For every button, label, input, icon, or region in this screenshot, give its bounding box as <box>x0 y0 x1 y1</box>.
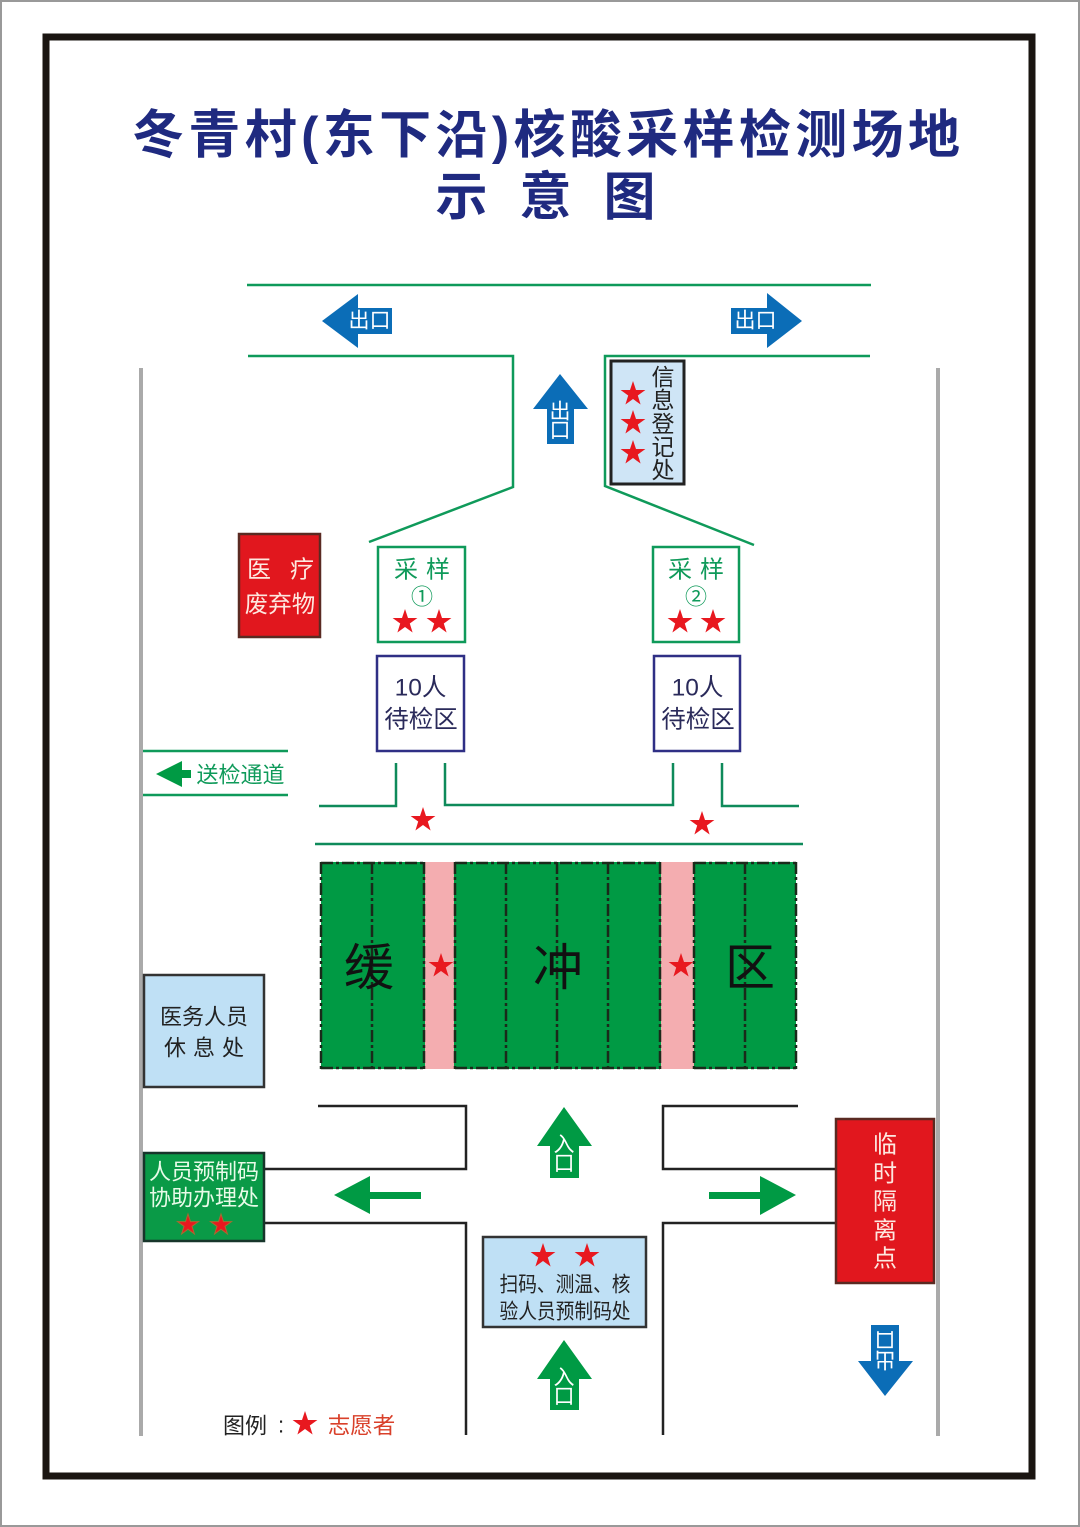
arrow: exit left: 出口 <box>348 310 390 332</box>
arrow: exit right <box>731 293 802 348</box>
panel: temporary isolation point: 点 <box>873 1246 897 1272</box>
icon: volunteer star right lane <box>690 811 714 834</box>
panel: information registration: 信 <box>652 364 674 390</box>
panel: pre-registration code assistance <box>144 1153 264 1241</box>
arrow: exit up: 口 <box>550 420 570 442</box>
panel: information registration: 登 <box>652 411 674 437</box>
panel: sampling point 1: 采 样 <box>394 556 450 584</box>
title <box>132 107 960 227</box>
panel: waiting area 1: 待检区 <box>384 706 458 734</box>
waiting lane lines <box>315 763 803 844</box>
panel: waiting area 1: 10人 <box>395 674 446 702</box>
panel: pre-registration code assistance: 协助办理处 <box>149 1186 259 1210</box>
panel: information registration: 处 <box>652 457 674 483</box>
icon: volunteer star left lane <box>411 807 435 830</box>
panel: scan and temperature check: 扫码、测温、核 <box>500 1274 630 1296</box>
panel: waiting area 2: 10人 <box>672 674 723 702</box>
panel: waiting area 1 <box>377 656 464 751</box>
legend: : <box>278 1412 284 1438</box>
panel: pre-registration code assistance: 人员预制码 <box>149 1160 259 1184</box>
panel: medical staff rest area <box>144 975 264 1087</box>
delivery channel: 送检通道 <box>196 762 285 788</box>
arrow: to right <box>709 1176 796 1215</box>
panel: medical staff rest area: 医务人员 <box>160 1004 248 1030</box>
panel: temporary isolation point: 临 <box>873 1132 897 1158</box>
arrow: entrance up upper <box>537 1107 592 1178</box>
panel: sampling point 2: 采 样 <box>668 556 724 584</box>
arrow: exit down: 口 <box>874 1328 896 1350</box>
panel: medical waste <box>239 534 320 637</box>
arrow: exit up: 出 <box>550 400 570 424</box>
arrow: exit right: 出口 <box>734 310 776 332</box>
panel: buffer zone: 区 <box>725 940 775 996</box>
arrow: to left <box>334 1176 421 1214</box>
site boundary walls <box>141 368 938 1436</box>
title: 冬青村(东下沿)核酸采样检测场地 <box>132 107 960 165</box>
panel: buffer zone: 缓 <box>344 940 394 996</box>
panel: temporary isolation point <box>836 1119 934 1283</box>
legend: 图例 <box>223 1414 267 1438</box>
panel: waiting area 2 <box>654 656 740 751</box>
exit road lines <box>247 285 871 545</box>
arrow: entrance up upper: 口 <box>554 1152 574 1176</box>
arrow: exit left <box>322 294 392 348</box>
entry road lines <box>264 1106 836 1435</box>
panel: buffer zone <box>321 862 796 1069</box>
arrow: entrance up lower: 入 <box>554 1366 574 1390</box>
panel: information registration <box>611 361 684 484</box>
panel: information registration: 记 <box>652 434 674 460</box>
panel: scan and temperature check: 验人员预制码处 <box>500 1300 630 1324</box>
arrow: entrance up lower <box>537 1340 592 1410</box>
panel: medical waste: 废弃物 <box>245 591 315 617</box>
title: 示 意 图 <box>436 169 656 227</box>
panel: sampling point 2 <box>653 547 739 642</box>
panel: sampling point 2: ② <box>685 584 707 610</box>
panel: medical waste: 医 疗 <box>247 556 314 584</box>
arrow: exit down <box>858 1325 913 1396</box>
panel: temporary isolation point: 隔 <box>873 1188 897 1216</box>
arrow: exit up <box>533 374 588 444</box>
panel: temporary isolation point: 离 <box>873 1218 897 1244</box>
legend <box>223 1411 395 1438</box>
panel: sampling point 1: ① <box>411 584 433 610</box>
panel: temporary isolation point: 时 <box>873 1160 897 1188</box>
panel: waiting area 2: 待检区 <box>661 706 735 734</box>
arrow: entrance up upper: 入 <box>554 1134 574 1156</box>
panel: medical staff rest area: 休 息 处 <box>164 1036 244 1060</box>
arrow: exit down: 出 <box>874 1348 896 1370</box>
panel: scan and temperature check <box>483 1237 646 1327</box>
legend: 志愿者 <box>328 1414 395 1438</box>
delivery channel <box>143 751 288 795</box>
arrow: entrance up lower: 口 <box>554 1386 574 1408</box>
panel: buffer zone: 冲 <box>533 940 583 996</box>
panel: information registration: 息 <box>652 387 674 413</box>
panel: sampling point 1 <box>378 547 465 642</box>
